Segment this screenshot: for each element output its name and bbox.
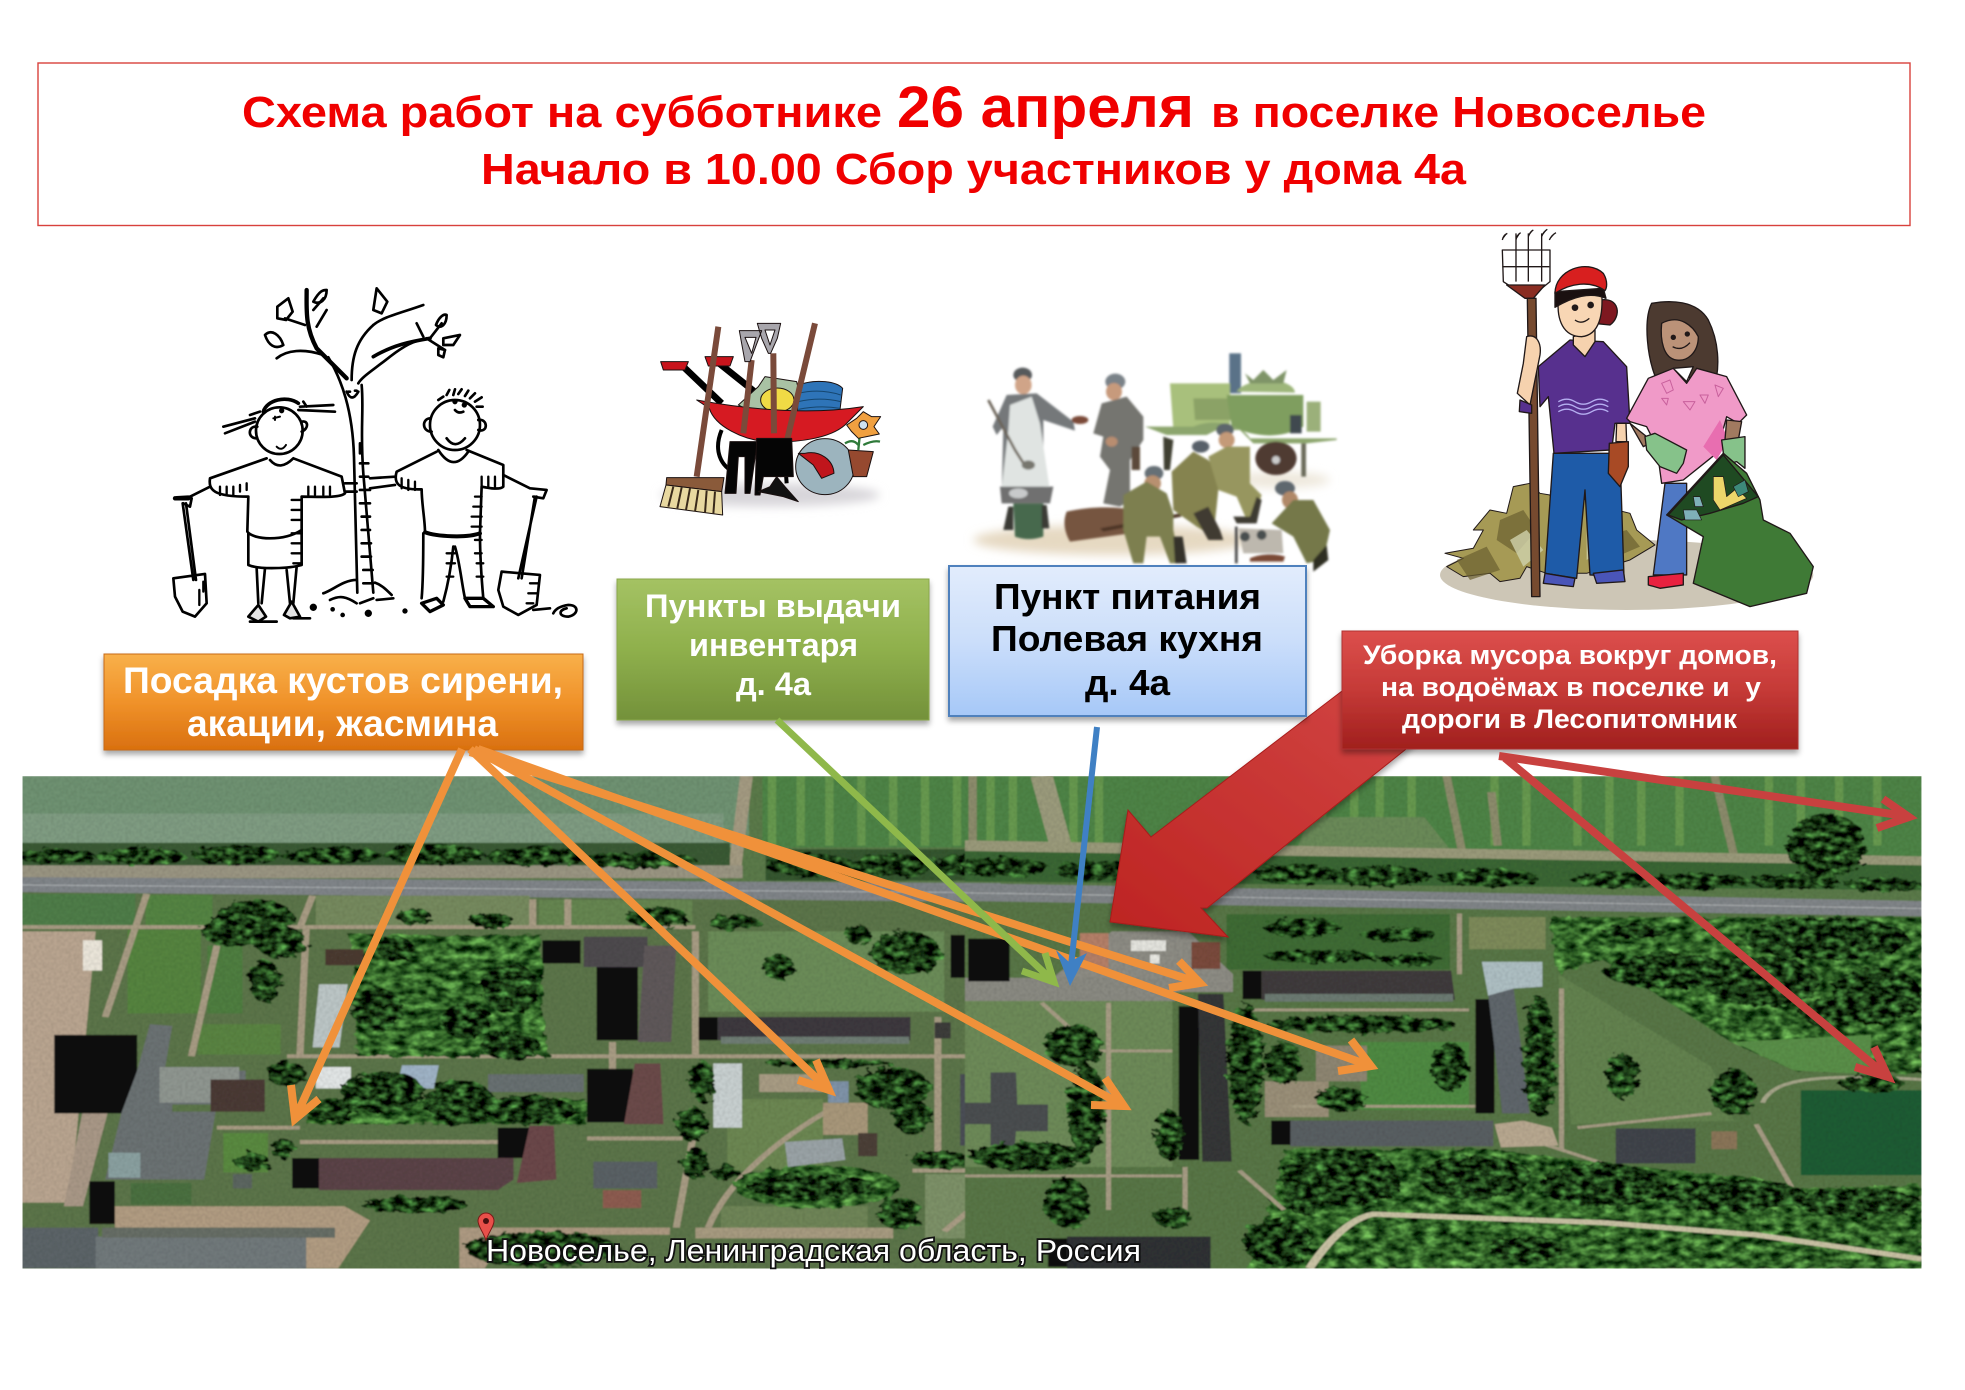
- label box: garbage cleanup: [1342, 631, 1798, 749]
- label box: garbage cleanup: Уборка мусора вокруг домов,: [1363, 640, 1777, 670]
- map caption with pin: [478, 1213, 1141, 1268]
- illustration: children planting a tree: [173, 288, 576, 622]
- label box: equipment points: Пункты выдачи: [645, 588, 901, 624]
- label box: planting shrubs: акации, жасмина: [187, 703, 498, 744]
- arrow: planting site 5: [470, 752, 1200, 988]
- map: trees: [19, 845, 1008, 1267]
- boy: [1517, 267, 1630, 587]
- illustration: boy and girl cleaning up: [1440, 229, 1813, 610]
- log: [1064, 507, 1130, 542]
- label box: garbage cleanup: на водоёмах в поселке и у: [1381, 672, 1761, 702]
- map: left half terrain and buildings: [19, 776, 1008, 1271]
- map: forest and meadow: [1227, 914, 1450, 970]
- map: buildings: [22, 937, 1000, 1269]
- illustration: field kitchen with soldiers: [973, 353, 1337, 572]
- map: grain texture: [22, 776, 1922, 1269]
- map: grass patches: [22, 894, 1000, 1238]
- arrow: cleanup pond: [1505, 758, 1888, 1077]
- arrow: kitchen: [1056, 727, 1097, 986]
- map caption with pin: Новоселье, Ленинградская область, Россия: [486, 1233, 1141, 1268]
- girl: [177, 399, 357, 622]
- big red arrow to village: [1110, 691, 1440, 937]
- map: shadows: [54, 935, 1000, 1224]
- map: plaza: [1056, 930, 1234, 993]
- label box: field kitchen: Пункт питания: [994, 576, 1261, 617]
- shovels: [173, 503, 207, 617]
- arrow: planting site 1: [291, 749, 462, 1119]
- label box: garbage cleanup: дороги в Лесопитомник: [1402, 704, 1738, 734]
- map: pond: [1801, 1090, 1922, 1175]
- rake: [1502, 250, 1550, 297]
- map: foliage base: [306, 935, 900, 1208]
- girl: [1627, 302, 1747, 588]
- label box: field kitchen: [949, 566, 1306, 716]
- map: buildings: [965, 942, 1737, 1269]
- arrow: equipment point: [777, 720, 1054, 982]
- title line 1: [242, 75, 1706, 140]
- label box: equipment points: [617, 579, 929, 720]
- label box: equipment points: д. 4а: [736, 666, 811, 702]
- title box: [38, 63, 1910, 226]
- arrows: planting sites: [291, 749, 1371, 1119]
- label box: planting shrubs: [104, 654, 583, 750]
- map: building shadows: [968, 938, 1495, 1267]
- seated soldiers: [1145, 466, 1163, 481]
- trash bag: [1667, 453, 1813, 607]
- arrow: planting site 4: [478, 749, 1371, 1071]
- cook: [1013, 368, 1032, 382]
- label box: equipment points: инвентаря: [689, 627, 858, 663]
- map: sandy ground: [22, 931, 96, 1203]
- map: trees: [959, 814, 1922, 1265]
- satellite map: [19, 776, 1922, 1271]
- soldier grey: [1105, 374, 1125, 390]
- map: paths: [1310, 1214, 1922, 1268]
- label box: field kitchen: Полевая кухня: [991, 618, 1263, 659]
- boy: [370, 389, 547, 612]
- arrow: planting site 3: [474, 749, 1124, 1106]
- label box: planting shrubs: Посадка кустов сирени,: [123, 660, 563, 701]
- title line 2: Начало в 10.00 Сбор участников у дома 4а: [481, 145, 1467, 194]
- illustration: wheelbarrow with tools: [660, 323, 881, 515]
- arrow: planting site 2: [470, 749, 829, 1090]
- title line 1: Схема работ на субботнике: [242, 88, 882, 137]
- arrow: cleanup north-east: [1499, 756, 1909, 828]
- title line 1: в поселке Новоселье: [1211, 88, 1706, 137]
- title line 1: 26 апреля: [897, 75, 1194, 140]
- map: foliage base: [1246, 917, 1922, 1269]
- leaf pile: [1445, 483, 1655, 582]
- map: right half terrain and buildings: [959, 776, 1922, 1269]
- label box: field kitchen: д. 4а: [1085, 662, 1171, 703]
